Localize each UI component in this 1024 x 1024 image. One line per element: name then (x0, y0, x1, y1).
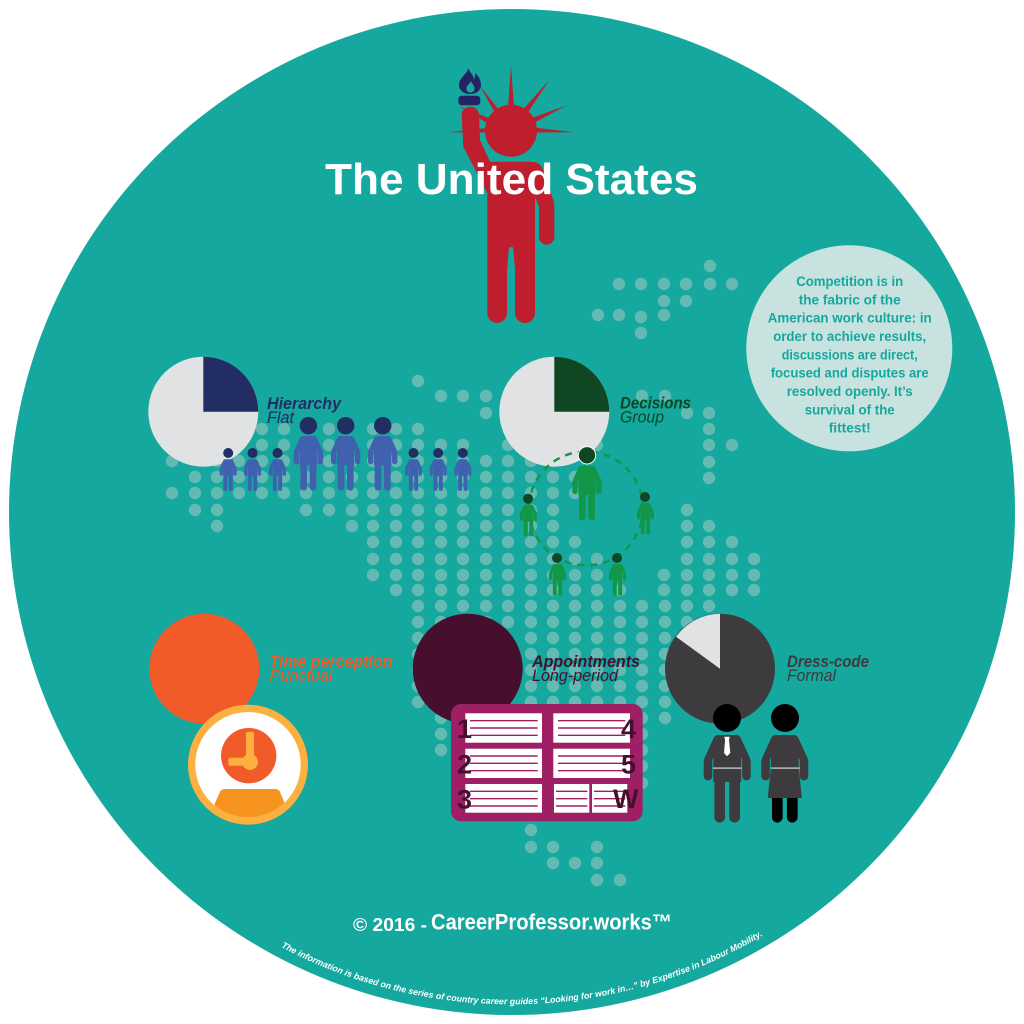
icon: people in dashed circle (520, 447, 654, 596)
label: hierarchy flat: Flat (267, 409, 295, 427)
icon: man in suit (704, 704, 751, 823)
callout: competition note: order to achieve results, (773, 328, 926, 344)
icon: row of people, managers taller (220, 417, 471, 491)
icon: Statue of Liberty figure (449, 66, 574, 323)
icon: weekly calendar (451, 704, 643, 821)
icon: person with clock head (188, 705, 308, 825)
callout: competition note: Competition is in (796, 273, 903, 289)
callout: competition note: American work culture: in (768, 310, 932, 326)
label: decisions group (620, 394, 691, 426)
pie chart: dress-code (665, 614, 775, 724)
label: time perception punctual: Time perception (270, 653, 392, 671)
label: hierarchy flat (267, 395, 342, 427)
icon: weekly calendar: W (613, 784, 639, 814)
pie chart: hierarchy (148, 357, 258, 467)
callout: competition note: discussions are direct, (782, 346, 918, 362)
label: appointments long-period: Appointments (531, 653, 640, 671)
label: decisions group: Group (620, 408, 664, 426)
callout: competition note: the fabric of the (799, 291, 901, 307)
label: time perception punctual (270, 653, 392, 685)
label: appointments long-period: Long-period (532, 667, 619, 685)
title: The United States (325, 155, 698, 204)
pie chart: decisions (499, 357, 609, 467)
curved source note: The information is based on the series of country career guides “Looking for work in…” by Expertise in Labour Mobility. (282, 932, 762, 1006)
panel: appointments (413, 614, 643, 821)
copyright line: © 2016 - (353, 914, 427, 935)
panel: hierarchy (148, 357, 471, 491)
icon: weekly calendar: 2 (457, 750, 472, 780)
icon: weekly calendar: 1 (457, 714, 472, 744)
callout: competition note: focused and disputes are (771, 365, 929, 381)
callout: competition note: resolved openly. It’s (787, 383, 913, 399)
label: dress-code formal (787, 653, 869, 685)
pie chart: appointments (413, 614, 523, 724)
callout: competition note (746, 245, 952, 451)
pie chart: time perception (149, 614, 259, 724)
label: time perception punctual: Punctual (270, 667, 334, 685)
label: dress-code formal: Dress-code (787, 653, 869, 671)
callout: competition note: survival of the (805, 401, 895, 417)
panel: decisions (499, 357, 691, 596)
icon: weekly calendar: 5 (621, 750, 636, 780)
copyright line (353, 910, 672, 935)
panel: time perception (149, 614, 392, 825)
icon: weekly calendar: 4 (621, 714, 636, 744)
callout: competition note: fittest! (829, 420, 871, 436)
panel: dress-code (665, 614, 869, 823)
icon: weekly calendar: 3 (457, 784, 472, 814)
label: appointments long-period (531, 653, 640, 685)
label: hierarchy flat: Hierarchy (267, 395, 342, 413)
icon: woman in skirt suit (761, 704, 808, 823)
dot world map (172, 266, 754, 880)
copyright line: CareerProfessor.works™ (431, 910, 672, 934)
label: decisions group: Decisions (620, 394, 691, 412)
label: dress-code formal: Formal (787, 667, 837, 685)
